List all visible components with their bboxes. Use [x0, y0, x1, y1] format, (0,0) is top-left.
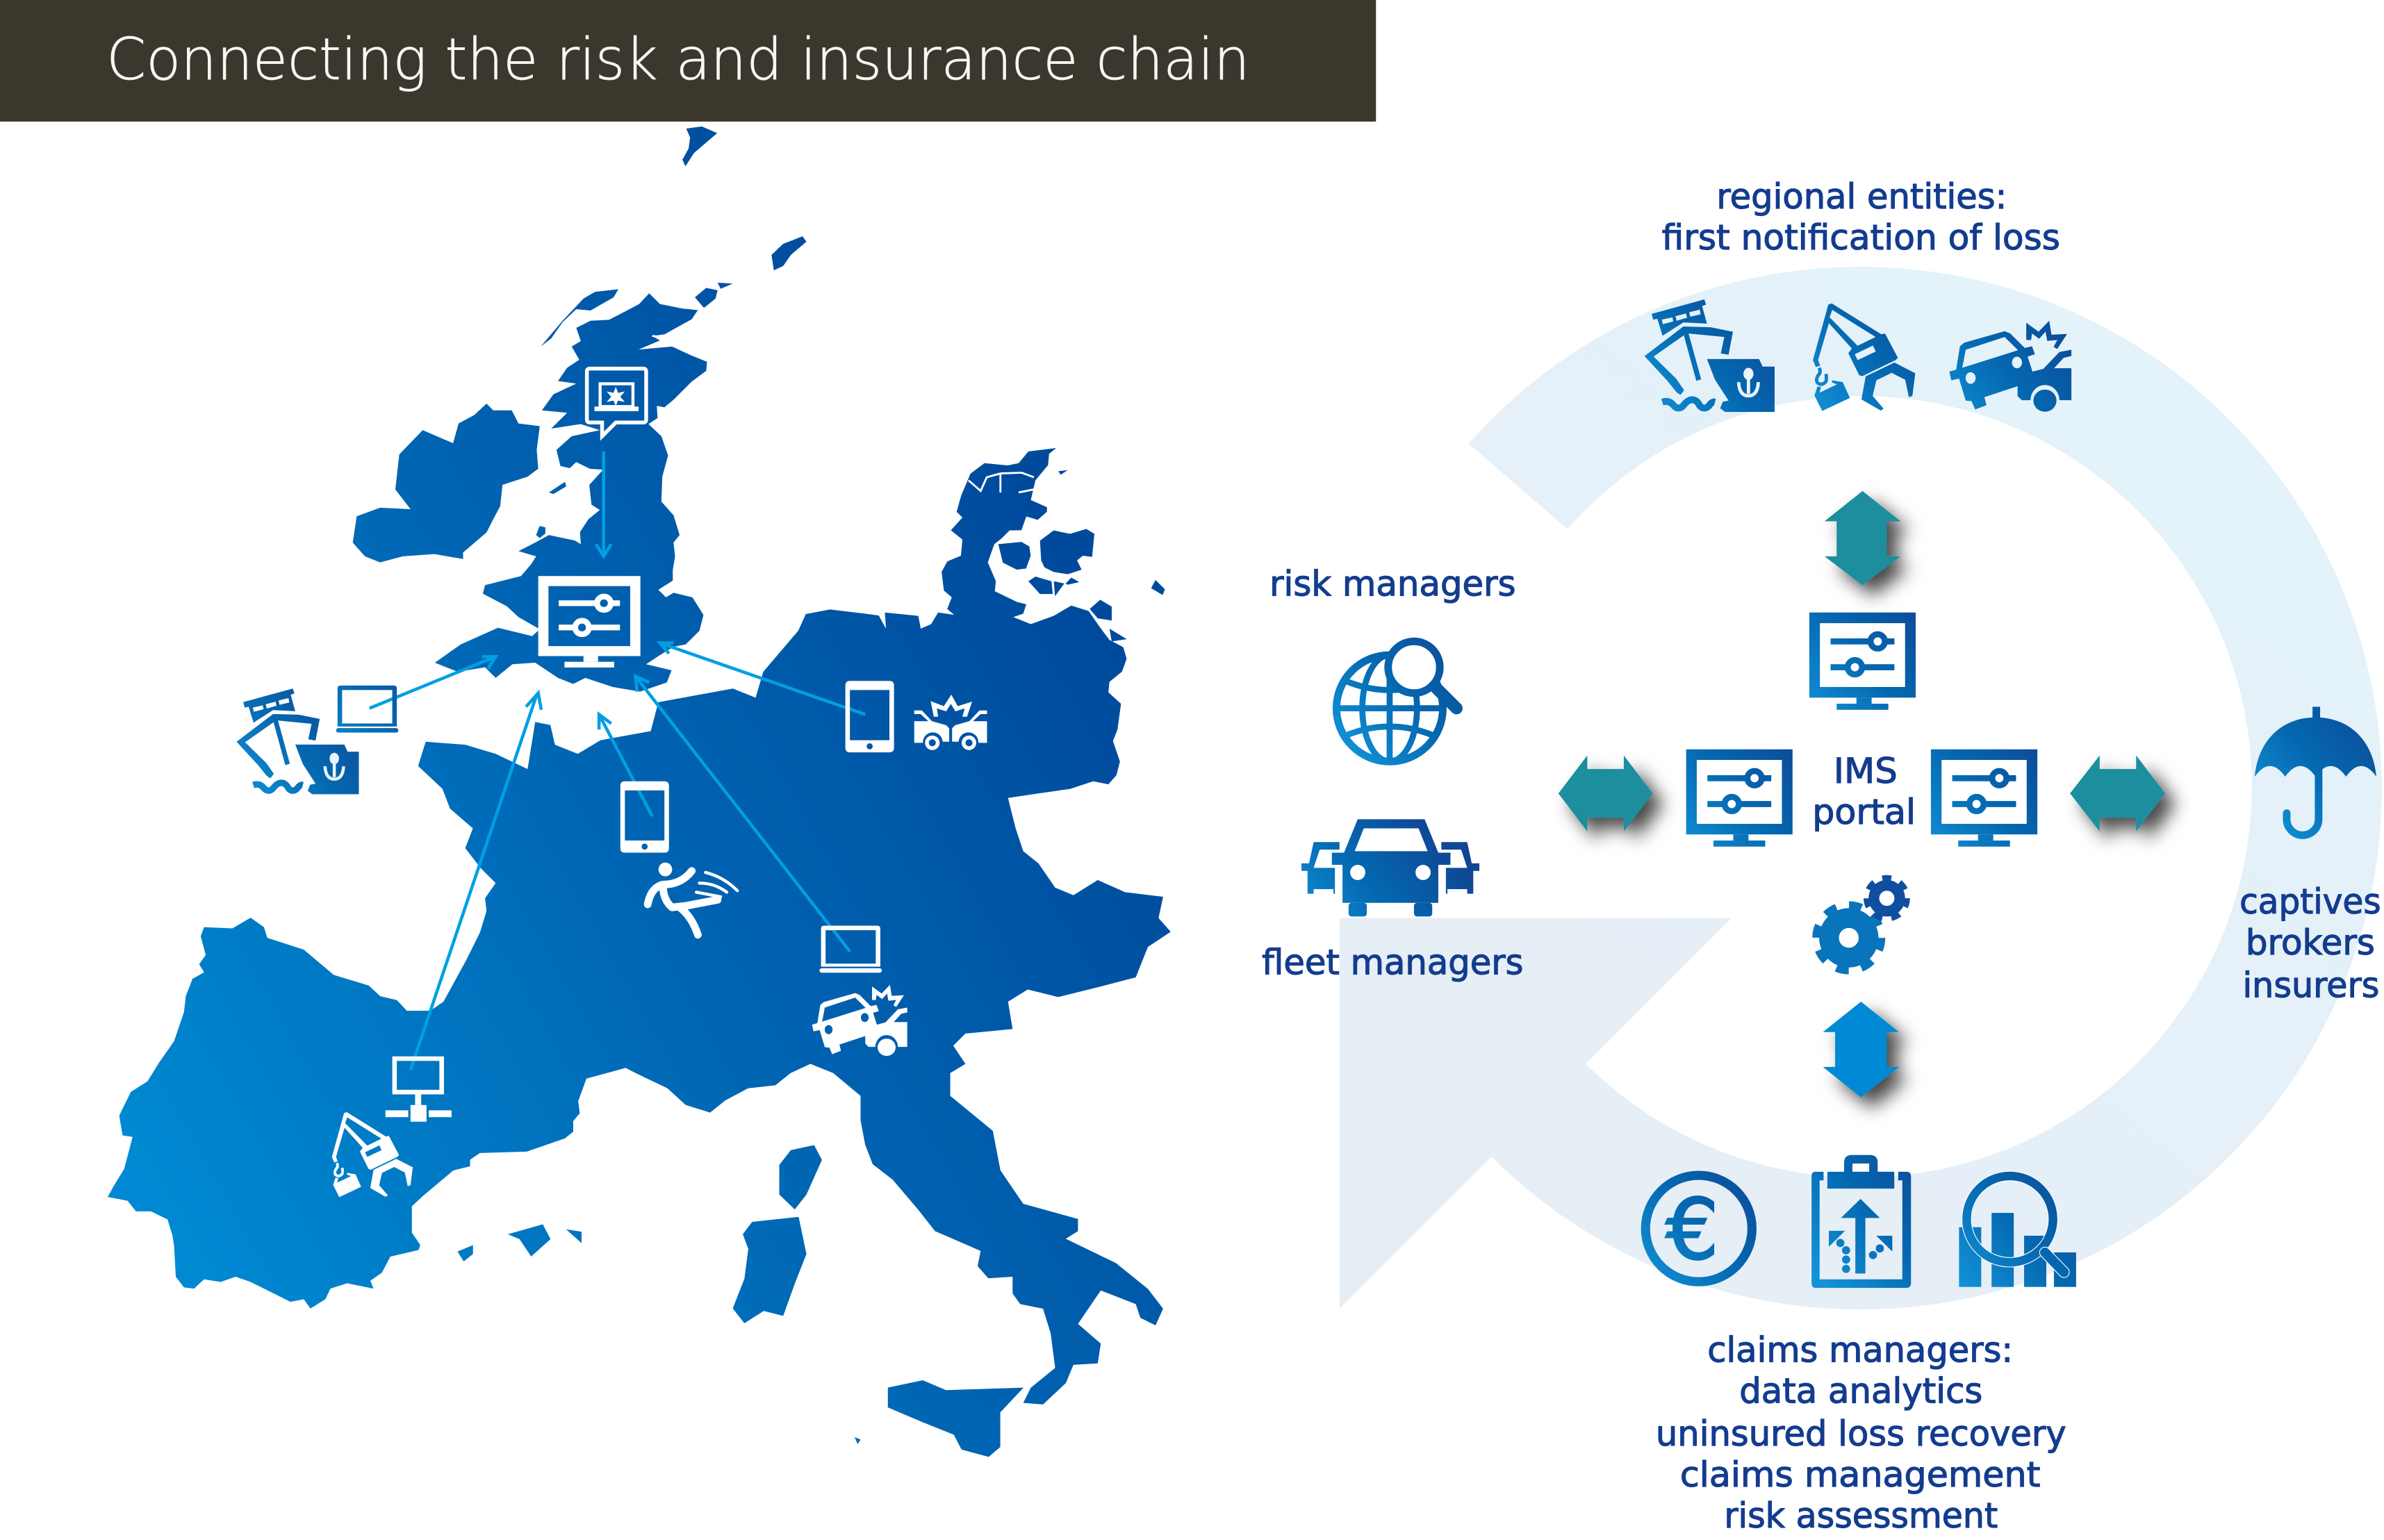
label: claims managers list [1656, 1330, 2066, 1536]
icon: top monitor [1809, 613, 1916, 710]
icon: ship and anchor [236, 688, 359, 794]
title banner [0, 0, 1376, 122]
label: fleet managers: fleet managers [1262, 942, 1524, 983]
heading: regional entities: first notification of loss [1662, 217, 2060, 258]
arrow: right teal double [2070, 755, 2165, 831]
icon: umbrella [2255, 706, 2376, 835]
arrow: bottom blue double [1823, 1002, 1899, 1098]
connection arrows [370, 452, 865, 1070]
icon: crane, regional [1813, 304, 1915, 411]
label: claims managers list: uninsured loss recovery [1656, 1413, 2066, 1454]
arrow: top teal double [1825, 491, 1900, 585]
background circular arrow [1340, 267, 2382, 1309]
label: captives brokers insurers: brokers [2246, 922, 2375, 963]
icon: clipboard with arrow [1811, 1155, 1911, 1288]
icon: two car collision [914, 695, 987, 750]
icon: laptop near ship [336, 686, 398, 733]
icon: fleet cars [1301, 819, 1479, 916]
label: IMS portal [1812, 750, 1916, 832]
heading: regional entities: regional entities: [1716, 176, 2007, 217]
icon: tablet in France [620, 781, 669, 853]
icon: car crash, regional [1949, 321, 2071, 412]
label: claims managers list: claims managers: [1707, 1330, 2013, 1371]
icon: car crash in Italy [812, 985, 907, 1056]
icon: globe and magnifier [1336, 641, 1456, 761]
icon: euro coin [1645, 1175, 1752, 1282]
map of western Europe [108, 126, 1171, 1457]
icon: ship and anchor, regional [1645, 299, 1775, 412]
label: IMS portal: IMS [1834, 750, 1898, 791]
title banner: Connecting the risk and insurance chain [106, 26, 1250, 93]
icon: right monitor [1931, 750, 2037, 847]
icon: phone on map [846, 681, 894, 752]
icon: bar chart with magnifier [1959, 1176, 2076, 1287]
label: risk managers: risk managers [1269, 563, 1516, 604]
icon: report laptop speech bubble [587, 369, 646, 436]
label: captives brokers insurers [2239, 881, 2381, 1005]
icon: euro coin: € [1666, 1182, 1719, 1279]
icon: crane in Spain [332, 1112, 413, 1197]
icon: network monitor in Spain [386, 1057, 452, 1122]
label: claims managers list: risk assessment [1724, 1495, 1998, 1536]
label: captives brokers insurers: insurers [2242, 964, 2379, 1005]
icon: gears [1816, 878, 1907, 970]
label: claims managers list: data analytics [1739, 1371, 1982, 1411]
icon: left monitor [1686, 750, 1793, 847]
icon: laptop in Italy [819, 926, 882, 972]
arrow: left teal double [1559, 755, 1652, 831]
label: claims managers list: claims management [1680, 1454, 2040, 1495]
label: IMS portal: portal [1812, 791, 1916, 832]
icon: slipping person [648, 863, 737, 935]
label: captives brokers insurers: captives [2239, 881, 2381, 922]
heading: regional entities [1662, 176, 2060, 258]
icon: IMS portal monitor on map [539, 576, 641, 668]
